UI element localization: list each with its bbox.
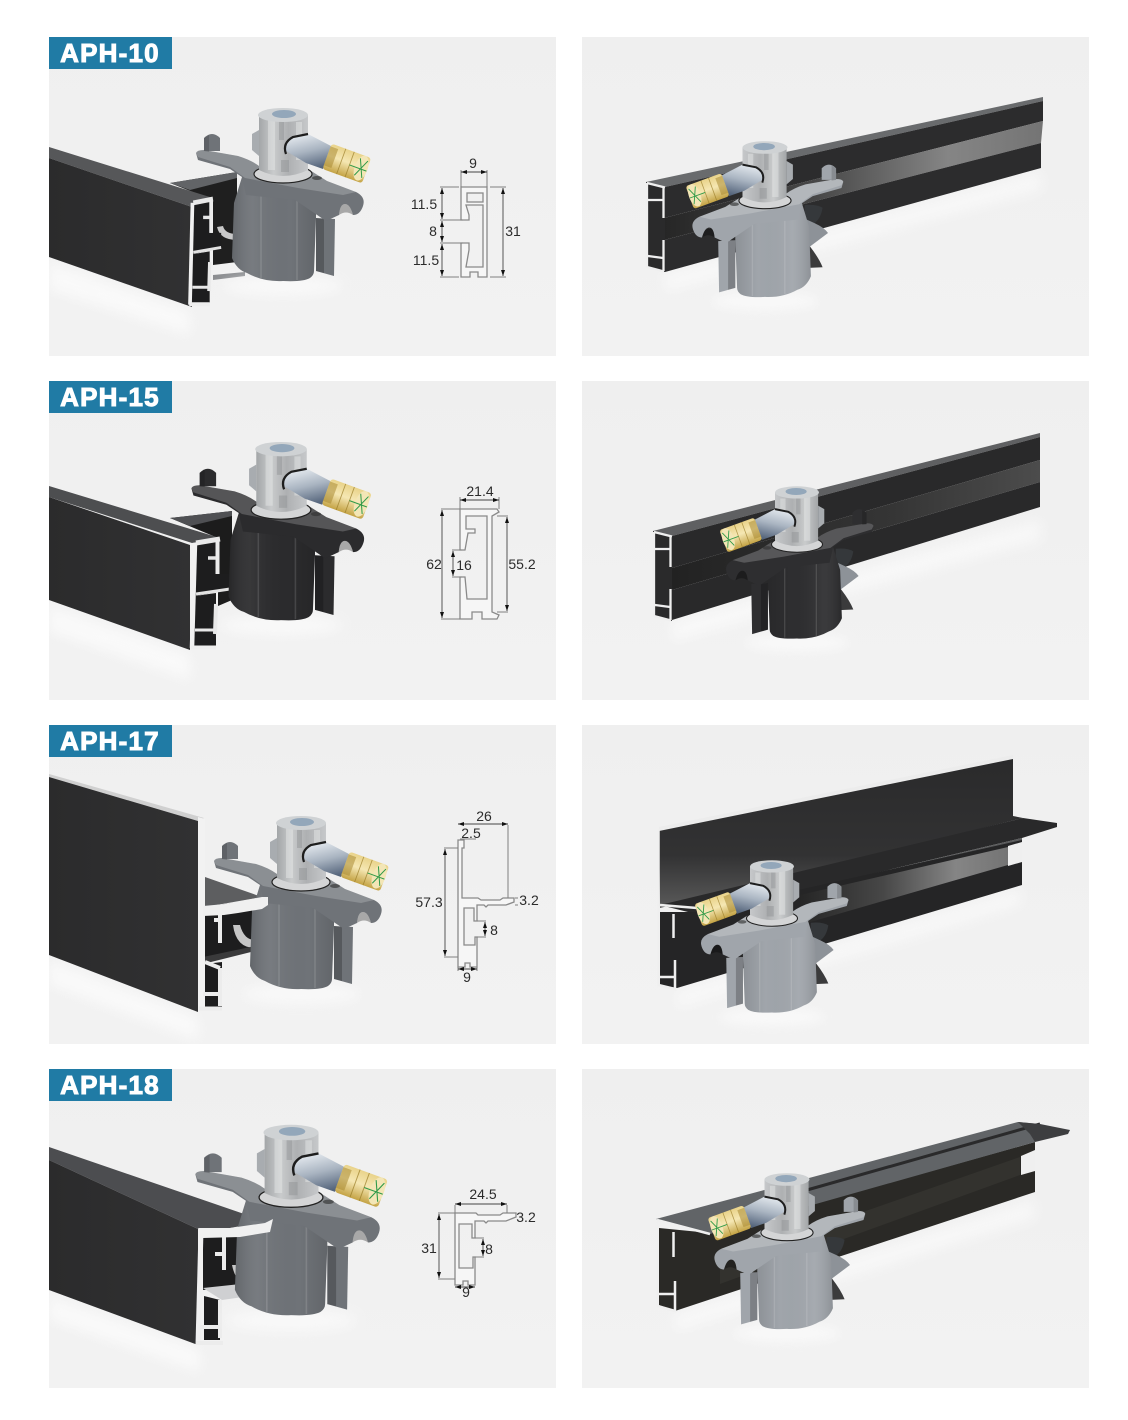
dimension drawing: APH-10: 11.5 (411, 196, 437, 212)
dimension drawing: APH-15 (426, 483, 536, 619)
dimension drawing: APH-10: 11.5 (413, 252, 439, 268)
dimension drawing: APH-18: 8 (485, 1241, 493, 1257)
dimension drawing: APH-18: 31 (421, 1240, 437, 1256)
rail: APH-10 left view (49, 147, 245, 335)
dimension drawing: APH-15: 55.2 (508, 556, 536, 572)
rail: APH-15 left view (49, 486, 232, 680)
connector: APH-18 right view (707, 1173, 865, 1342)
connector: APH-18 left view (195, 1125, 389, 1332)
panel: APH-18 detail (49, 1069, 556, 1388)
rail: APH-18 left view (49, 1147, 273, 1372)
heading: APH-17: APH-17 (60, 726, 160, 756)
dimension drawing: APH-17: 57.3 (415, 894, 443, 910)
dimension drawing: APH-17: 2.5 (461, 825, 481, 841)
heading: APH-18: APH-18 (60, 1070, 160, 1100)
panel: APH-18 rail view (582, 1069, 1089, 1388)
dimension drawing: APH-15: 21.4 (466, 483, 494, 499)
connector: APH-17 left view (214, 816, 390, 1004)
dimension drawing: APH-10: 8 (429, 223, 437, 239)
rail: APH-17 left view (49, 774, 262, 1040)
panel: APH-17 detail (49, 725, 556, 1044)
dimension drawing: APH-17: 9 (463, 969, 471, 985)
rail: APH-10 right view (646, 97, 1043, 292)
connector: APH-10 right view (685, 141, 843, 310)
dimension drawing: APH-18: 3.2 (516, 1209, 536, 1225)
dimension drawing: APH-18: 24.5 (469, 1186, 497, 1202)
connector: APH-17 right view (694, 860, 849, 1026)
dimension drawing: APH-17: 26 (476, 808, 492, 824)
dimension drawing: APH-18 (421, 1186, 536, 1300)
dimension drawing: APH-10: 9 (469, 155, 477, 171)
panel: APH-15 rail view (582, 381, 1089, 700)
connector: APH-10 left view (196, 108, 372, 296)
panel: APH-10 detail (49, 37, 556, 356)
panel: APH-15 detail (49, 381, 556, 700)
heading: APH-10: APH-10 (60, 38, 160, 68)
dimension drawing: APH-17: 8 (490, 922, 498, 938)
dimension drawing: APH-17 (415, 808, 539, 985)
panel: APH-10 rail view (582, 37, 1089, 356)
dimension drawing: APH-15: 16 (456, 557, 472, 573)
panel: APH-17 rail view (582, 725, 1089, 1044)
rail: APH-17 right view (658, 755, 1057, 1008)
dimension drawing: APH-10 (411, 155, 521, 277)
rail: APH-18 right view (656, 1122, 1070, 1332)
heading: APH-15: APH-15 (60, 382, 160, 412)
dimension drawing: APH-15: 62 (426, 556, 442, 572)
rail arm: APH-17 left view (203, 897, 268, 916)
dimension drawing: APH-17: 3.2 (519, 892, 539, 908)
rail: APH-15 right view (653, 433, 1040, 642)
connector: APH-15 right view (719, 486, 874, 652)
dimension drawing: APH-10: 31 (505, 223, 521, 239)
rail arm: APH-18 left view (198, 1219, 273, 1238)
connector: APH-15 left view (191, 442, 372, 636)
dimension drawing: APH-18: 9 (462, 1284, 470, 1300)
